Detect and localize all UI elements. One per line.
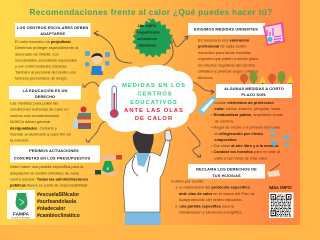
body text: y con enfermedades crónicas. xyxy=(15,64,68,68)
body text: Debemos proteger especialmente al xyxy=(15,45,78,50)
heading box xyxy=(9,86,81,100)
bullet list: evaporativo xyxy=(214,137,237,142)
body text: El calor excesivo es perjudicial. xyxy=(15,39,72,44)
body text: mandar al alumnado a casa NO es xyxy=(10,132,71,136)
cloud heading: green: EDUCATIVOS xyxy=(130,100,178,106)
central cloud xyxy=(96,65,197,134)
panel: exigimos medidas urgentes xyxy=(188,23,265,80)
heading box xyxy=(10,146,100,162)
body text: la solución. xyxy=(10,138,30,143)
cloud heading: green: CENTROS xyxy=(137,92,173,98)
arrow: cloud to budget panel xyxy=(86,120,110,142)
bullet list: • Renaturalizar patios, ampliando zonas xyxy=(211,112,283,117)
body text xyxy=(198,38,259,80)
bullet list: de sombra. xyxy=(214,118,234,124)
body text: Es necesaria una valoración xyxy=(198,38,250,42)
cloud heading: red: ANTE LAS OLAS xyxy=(124,108,184,114)
hashtags xyxy=(37,192,80,219)
body text: 2. una partida específica para la xyxy=(175,204,235,208)
body text: alumnado de infantil, con xyxy=(15,51,59,56)
body text: ante olas de calor en el marco del Plan de xyxy=(179,191,256,196)
body text: desigualdades. Cerrarlo y xyxy=(10,125,57,130)
arrow: cloud to urgent measures xyxy=(157,36,188,67)
heading box: LOS CENTROS ESCOLARES DEBEN xyxy=(17,25,88,30)
panel: medidas a corto plazo xyxy=(211,84,292,160)
bullet list: • Cambiar los horarios para no salir al xyxy=(211,149,280,154)
heading box: LA EDUCACIÓN ES UN xyxy=(23,88,67,93)
body text: 1. la elaboración del protocolo específico xyxy=(175,185,250,190)
body text: públicas tienen su parte de responsabilidad xyxy=(10,183,87,188)
body text: necesidades educativas especiales xyxy=(15,57,77,62)
heading box xyxy=(15,23,90,37)
blue collar xyxy=(136,153,150,167)
person writing on cloud xyxy=(123,127,172,225)
title: Recomendaciones frente al calor ¿Qué puedes hacer tú? xyxy=(29,7,273,17)
hashtags: #escuelaSINcalor xyxy=(37,192,79,198)
logo: FAMPA xyxy=(7,190,35,219)
cloud heading: red: DE CALOR xyxy=(135,116,173,122)
bullet list: • Dar clase al aire libre y a la sombra. xyxy=(211,143,279,148)
arrow: cloud to short-term measures xyxy=(192,82,214,94)
body text: condiciones extremas de calor en xyxy=(10,107,69,112)
body text: Autoprotección del centro educativo. xyxy=(179,197,243,202)
body text xyxy=(10,100,71,143)
body text: los efectos negativos del cambio xyxy=(198,62,256,67)
cloud heading: red xyxy=(124,108,184,122)
arrow: person to rights panel xyxy=(188,127,201,157)
icon: solar sail xyxy=(197,96,217,115)
panel: reclama los derechos xyxy=(171,164,265,215)
heading box: DERECHO xyxy=(35,94,55,99)
body text: NUNCA deben generar xyxy=(10,119,51,124)
icon: pen and paper xyxy=(267,164,280,177)
body text: Solicita por escrito: xyxy=(171,178,204,184)
body text: adaptación al cambio climático de cada xyxy=(10,170,80,175)
logo: FAMPA: ALCALÁ DE HENARES xyxy=(11,216,31,219)
body text: urgentes que palien a medio plazo xyxy=(198,56,259,61)
logo: FAMPA: FAMPA xyxy=(13,212,30,216)
arrow: burst of ideas to first panel xyxy=(94,31,132,63)
hashtags: #cambioclimático xyxy=(37,213,80,219)
arrow: cloud to education panel xyxy=(83,82,103,91)
panel: actuaciones en presupuestos xyxy=(10,146,100,188)
heading box: TUS HIJOS/AS xyxy=(212,173,241,178)
heading box: RECLAMA LOS DERECHOS DE xyxy=(196,166,257,172)
cloud heading: green: MEDIDAS EN LOS xyxy=(122,83,186,89)
body text: factores personales de riesgo. xyxy=(15,76,68,81)
heading box: CONCRETAS EN LOS PRESUPUESTOS xyxy=(14,156,90,160)
heading box: PEDIMOS ACTUACIONES xyxy=(29,148,79,153)
icon: chart document xyxy=(263,22,285,46)
cloud heading: green xyxy=(122,83,186,106)
icon: row of trees xyxy=(240,71,294,84)
body text: climático y priorizar según criterios xyxy=(198,69,258,74)
bullet list: • Instalar elementos de protección xyxy=(211,100,274,105)
hair xyxy=(133,127,154,153)
bullet list: la refrigeración por efecto xyxy=(214,131,263,136)
body text: centro escolar. Todas las administraciones xyxy=(10,176,89,182)
body text: educativo para tomar medidas xyxy=(198,50,251,55)
hashtags: #oladecalor xyxy=(37,206,65,212)
heading box xyxy=(216,84,292,98)
heading box: ALGUNAS MEDIDAS A CORTO xyxy=(224,86,284,91)
icon: apple and books xyxy=(74,106,91,129)
body text: técnicos. xyxy=(198,75,214,80)
bullet list xyxy=(211,100,283,160)
body text: profesional de cada centro xyxy=(198,44,247,49)
icon: hands with money bag: € xyxy=(107,166,110,171)
callout: las AMPA burst: Las AMPA xyxy=(138,23,157,28)
icon: water drops xyxy=(268,127,293,147)
callout: las AMPA burst: compartiendo xyxy=(134,30,160,34)
heading box: PLAZO SON: xyxy=(241,92,267,97)
QR code xyxy=(269,192,294,218)
body text xyxy=(10,164,89,188)
callout: las AMPA burst xyxy=(132,18,174,58)
jeans xyxy=(125,211,161,225)
body text: Debe haber una partida específica para la xyxy=(10,164,84,169)
hoodie xyxy=(123,139,170,212)
callout: las AMPA burst: soluciones xyxy=(137,36,157,41)
body text: También al personal del centro con xyxy=(15,70,76,75)
body text xyxy=(171,178,256,215)
bullet list: • Regar de noche o a primera hora para xyxy=(211,125,281,130)
body text: centros mal acondicionados. xyxy=(10,113,60,118)
callout: las AMPA burst: climáticas xyxy=(138,42,156,48)
body text xyxy=(15,39,78,81)
panel: la educación es un derecho xyxy=(9,86,81,143)
hood detail xyxy=(132,156,150,176)
heading box xyxy=(188,164,265,178)
body text: climatización y eficiencia energética. xyxy=(179,210,243,215)
label: más info: Más INFO xyxy=(269,185,292,191)
icon: overheated child xyxy=(85,51,110,75)
icon: hands with money bag xyxy=(95,154,122,176)
bullet list: patio a las horas de más calor. xyxy=(214,156,268,160)
heading box: EXIGIMOS MEDIDAS URGENTES xyxy=(194,26,258,32)
body text: Las medidas para paliar las xyxy=(10,100,58,106)
hashtags: #surfeandolaola xyxy=(37,199,76,205)
icon: thermometer xyxy=(110,86,118,118)
bullet list: solar: toldos, estores, pérgolas, velas.. xyxy=(214,106,283,111)
heading box: ADAPTARSE xyxy=(40,31,65,36)
panel: centros escolares xyxy=(15,23,90,81)
hand xyxy=(165,130,172,141)
